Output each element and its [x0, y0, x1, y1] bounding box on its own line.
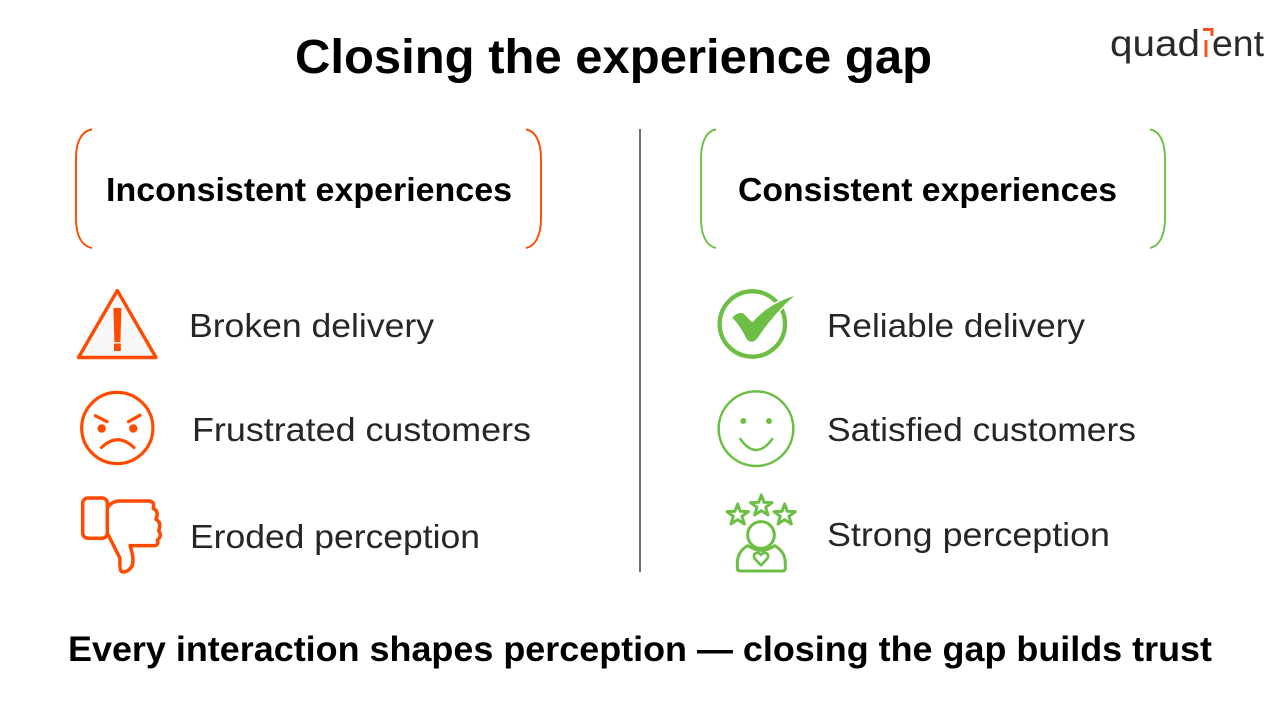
logo: quadient: quad — [1110, 23, 1200, 64]
footer message: Every interaction shapes perception — closing the gap builds trust — [68, 630, 1212, 669]
logo: quadient — [1110, 23, 1265, 64]
panel: inconsistent experiences — [76, 130, 541, 572]
icon: warning triangle — [78, 290, 156, 358]
label: frustrated customers: Frustrated customers — [192, 411, 531, 448]
heading bracket: inconsistent — [76, 130, 541, 248]
icon: thumbs down — [83, 498, 160, 572]
heading: inconsistent experiences: Inconsistent experiences — [106, 171, 512, 208]
icon: smiley face — [719, 391, 793, 466]
divider — [639, 129, 641, 572]
label: satisfied customers: Satisfied customers — [827, 411, 1136, 448]
label: broken delivery: Broken delivery — [189, 307, 435, 344]
icon: check mark — [720, 291, 794, 357]
panel: consistent experiences — [701, 130, 1165, 571]
heading: consistent experiences: Consistent experiences — [738, 171, 1117, 208]
icon: person with stars — [727, 495, 795, 571]
title: Closing the experience gap — [295, 31, 932, 84]
icon: angry face — [82, 392, 153, 464]
label: reliable delivery: Reliable delivery — [827, 307, 1086, 344]
label: strong perception: Strong perception — [827, 516, 1110, 553]
logo: quadient: ent — [1212, 23, 1265, 64]
label: eroded perception: Eroded perception — [190, 518, 480, 555]
heading bracket: consistent — [701, 130, 1165, 248]
